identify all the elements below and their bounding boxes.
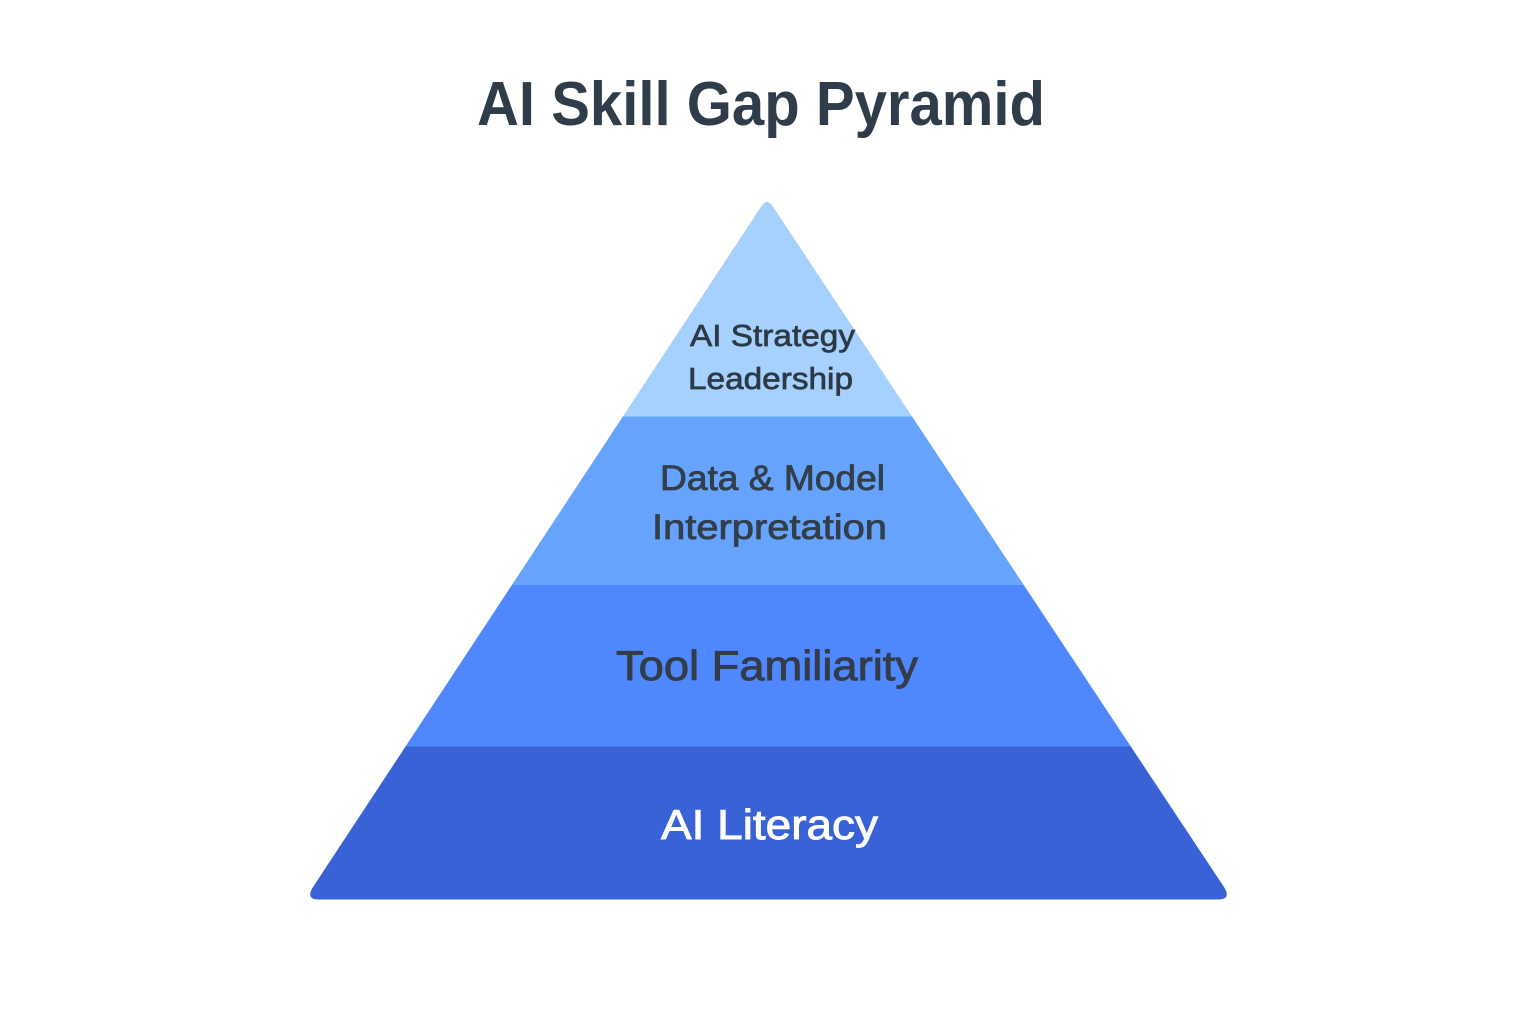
label: Data & Model Interpretation: Data & Model — [660, 459, 885, 498]
title: AI Skill Gap Pyramid — [477, 70, 1045, 139]
tier: AI Strategy Leadership — [623, 202, 912, 416]
tier: AI Literacy — [280, 746, 1260, 900]
label: Data & Model Interpretation — [652, 459, 887, 547]
pyramid — [280, 190, 1260, 900]
label: AI Literacy: AI Literacy — [661, 801, 878, 848]
tier: Tool Familiarity — [406, 585, 1131, 746]
label: AI Strategy Leadership: AI Strategy — [690, 318, 856, 353]
label: AI Strategy Leadership: Leadership — [688, 361, 853, 396]
label: Tool Familiarity: Tool Familiarity — [616, 642, 918, 689]
tier: Data & Model Interpretation — [512, 416, 1024, 585]
label: Data & Model Interpretation: Interpretation — [652, 508, 887, 547]
label: AI Strategy Leadership — [688, 318, 856, 396]
